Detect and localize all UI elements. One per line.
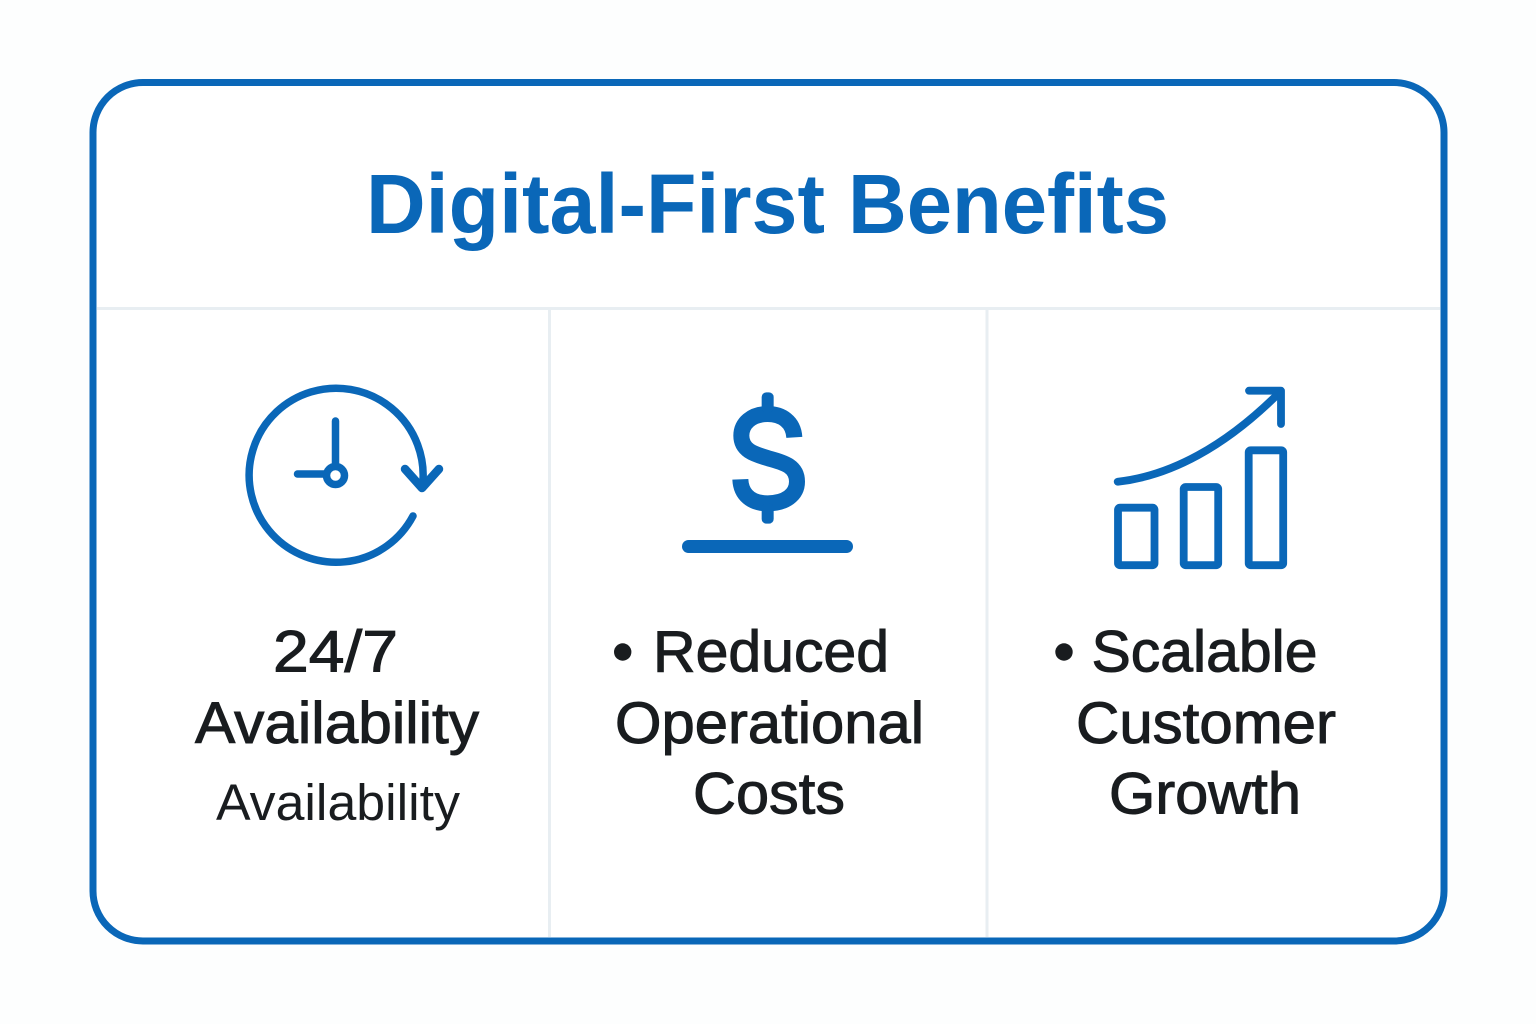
text: reduced operational costs: Reduced	[653, 620, 889, 684]
title	[366, 157, 1169, 251]
icon: clock with circular arrow	[249, 388, 439, 562]
text: 24/7 availability: Availability	[195, 691, 479, 756]
text: 24/7 availability: 24/7	[273, 620, 398, 684]
text: 24/7 availability	[195, 620, 479, 831]
icon: growth bar chart with arrow	[1118, 391, 1283, 565]
panel: benefits card	[93, 82, 1444, 941]
text: reduced operational costs	[614, 620, 924, 826]
text: reduced operational costs: Costs	[693, 762, 845, 826]
text: reduced operational costs: Operational	[615, 691, 924, 756]
text: scalable customer growth: Growth	[1109, 762, 1301, 826]
title: Benefits	[848, 157, 1169, 251]
text: 24/7 availability: Availability	[216, 774, 461, 831]
text: scalable customer growth: Scalable	[1092, 620, 1318, 684]
text: scalable customer growth: Customer	[1076, 691, 1336, 756]
text: scalable customer growth	[1055, 620, 1336, 826]
icon: dollar sign on a line	[682, 392, 853, 553]
title: Digital-First	[366, 157, 825, 251]
